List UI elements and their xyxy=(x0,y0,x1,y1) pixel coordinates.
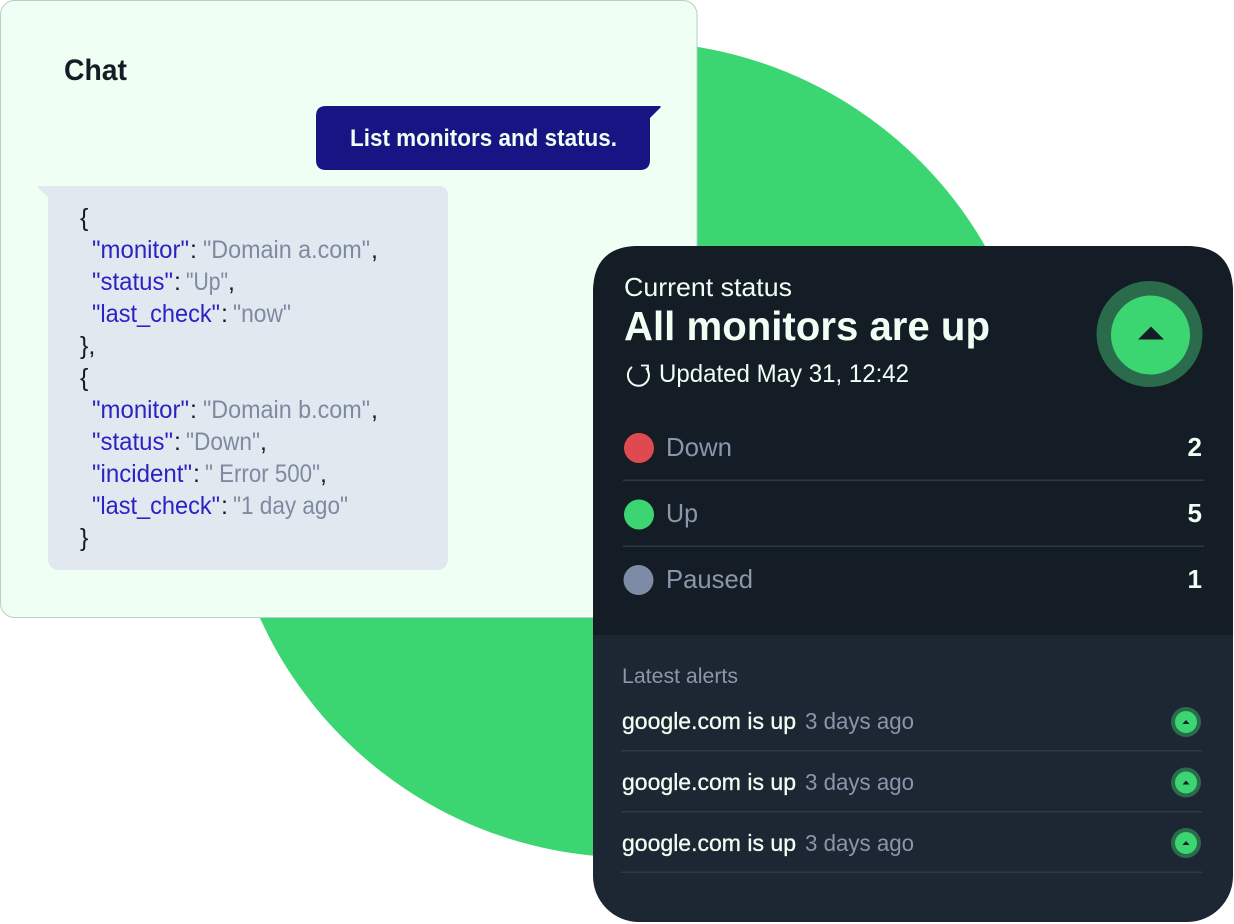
user message bubble: List monitors and status. xyxy=(350,125,617,152)
chat panel background xyxy=(0,0,697,618)
updated timestamp: Updated May 31, 12:42 xyxy=(659,360,909,388)
response bubble with JSON: "incident" xyxy=(92,460,192,488)
response bubble with JSON: { xyxy=(80,364,88,392)
response bubble with JSON: }, xyxy=(80,332,95,360)
response bubble with JSON: "last_check" xyxy=(92,492,220,520)
response bubble with JSON: : xyxy=(221,492,228,520)
panel: chat xyxy=(0,0,697,618)
response bubble with JSON: : xyxy=(190,236,197,264)
response bubble with JSON: "monitor" xyxy=(92,396,189,424)
response bubble with JSON: "Domain b.com" xyxy=(203,396,370,424)
panel: status card xyxy=(593,246,1233,922)
response bubble with JSON: "Down" xyxy=(186,428,260,456)
alert row 2: google.com is up xyxy=(622,769,796,795)
alert row 3: google.com is up xyxy=(622,830,796,856)
response bubble with JSON: "status" xyxy=(92,428,173,456)
card background xyxy=(593,246,1233,922)
response bubble with JSON: "status" xyxy=(92,268,173,296)
response bubble with JSON xyxy=(38,186,448,570)
response bubble with JSON: "now" xyxy=(233,300,291,328)
icon: refresh xyxy=(628,366,649,386)
row: paused: Paused xyxy=(666,564,753,594)
current status label: Current status xyxy=(624,272,792,302)
alert row 2 xyxy=(622,768,1201,798)
response bubble with JSON: , xyxy=(371,236,378,264)
row: down: 2 xyxy=(1188,432,1202,462)
alert row 2: 3 days ago xyxy=(805,769,914,795)
chat heading: Chat xyxy=(64,54,127,87)
card top section xyxy=(593,246,1233,635)
icon: status up xyxy=(1096,281,1202,387)
row: up: 5 xyxy=(1188,498,1202,528)
response bubble with JSON: { xyxy=(80,204,88,232)
response bubble with JSON: , xyxy=(228,268,235,296)
response bubble with JSON: : xyxy=(190,396,197,424)
response bubble with JSON: : xyxy=(174,268,181,296)
status headline: All monitors are up xyxy=(624,303,990,349)
response bubble with JSON: : xyxy=(221,300,228,328)
row: down: Down xyxy=(666,432,732,462)
response bubble with JSON: "monitor" xyxy=(92,236,189,264)
response bubble with JSON: " Error 500" xyxy=(205,460,320,488)
response bubble with JSON: : xyxy=(174,428,181,456)
response bubble with JSON: , xyxy=(320,460,327,488)
alert row 3 xyxy=(622,828,1201,858)
response bubble with JSON: "Up" xyxy=(186,268,228,296)
row: up xyxy=(624,498,1202,530)
alert row 3: 3 days ago xyxy=(805,830,914,856)
response bubble with JSON: , xyxy=(260,428,267,456)
response bubble with JSON: "last_check" xyxy=(92,300,220,328)
row: down xyxy=(624,432,1202,463)
latest alerts heading: Latest alerts xyxy=(622,665,738,688)
row: paused xyxy=(624,564,1202,595)
green background circle xyxy=(224,42,1040,858)
response bubble with JSON: } xyxy=(80,524,88,552)
response bubble with JSON: "Domain a.com" xyxy=(203,236,370,264)
alert row 1: google.com is up xyxy=(622,708,796,734)
row: paused: 1 xyxy=(1188,564,1202,594)
alert row 1 xyxy=(622,707,1201,737)
row: up: Up xyxy=(666,498,698,528)
response bubble with JSON: , xyxy=(371,396,378,424)
user message bubble xyxy=(316,106,661,170)
response bubble with JSON: "1 day ago" xyxy=(233,492,348,520)
alert row 1: 3 days ago xyxy=(805,708,914,734)
response bubble with JSON: : xyxy=(193,460,200,488)
